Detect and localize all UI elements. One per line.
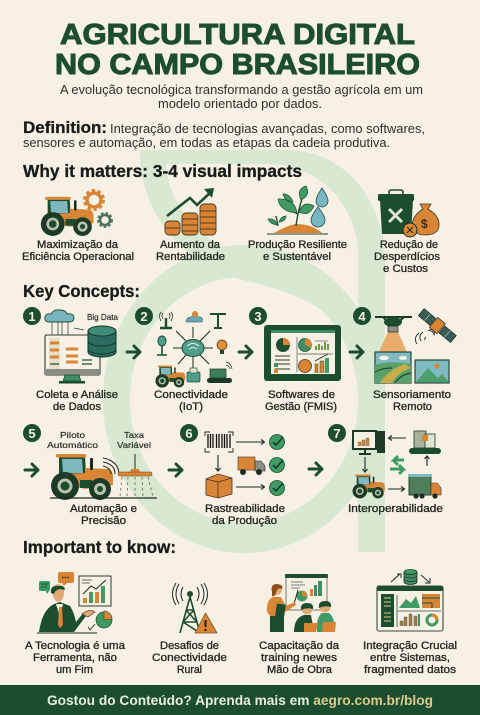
- caption: [265, 389, 337, 413]
- caption: Integração Crucial: [363, 640, 457, 652]
- caption: Softwares de: [268, 389, 335, 401]
- panel: systems integration: [363, 570, 457, 676]
- panel: workforce training: [259, 574, 339, 676]
- caption: e Custos: [383, 263, 428, 275]
- caption: (IoT): [179, 401, 203, 413]
- arrow 6 to 7: [309, 463, 322, 475]
- subtitle: [60, 82, 423, 111]
- caption: Remoto: [393, 401, 432, 413]
- icon: plant and drops: [267, 186, 328, 234]
- arrow 1 to 2: [127, 346, 140, 358]
- icon: tower with warning: [172, 583, 217, 633]
- label: piloto automatico: Automático: [47, 440, 98, 450]
- caption: Maximização da: [37, 239, 118, 251]
- label: taxa variavel: Variável: [117, 440, 151, 450]
- caption: Rastreabilidade: [205, 503, 285, 515]
- caption: [70, 503, 137, 527]
- caption: A Tecnologia é uma: [25, 640, 125, 652]
- panel: impact efficiency: [22, 191, 134, 263]
- label: taxa variavel: Taxa: [124, 430, 144, 440]
- definition: Integração de tecnologias avançadas, como softwares,: [110, 122, 425, 136]
- heading: why it matters: Why it matters: 3-4 visual impacts: [23, 161, 302, 181]
- caption: [152, 640, 227, 676]
- caption: da Produção: [212, 515, 277, 527]
- label: taxa variavel: [117, 430, 151, 450]
- panel: impact profitability: [156, 188, 225, 263]
- arrow into step 5: [25, 464, 38, 476]
- icon: connected systems loop: [353, 431, 441, 499]
- icon: presenter with chart: [37, 572, 112, 633]
- caption: [259, 640, 339, 676]
- caption: [22, 239, 134, 263]
- definition: Definition:: [23, 119, 107, 137]
- footer call to action: Gostou do Conteúdo? Aprenda mais em aegro.com.br/blog: [47, 692, 433, 708]
- caption: [156, 239, 225, 263]
- title: [55, 19, 420, 81]
- caption: fragmented datos: [364, 664, 456, 676]
- heading: key concepts: Key Concepts:: [23, 281, 140, 301]
- icon: autopilot tractor and sprayer: [50, 454, 157, 500]
- number badge 7: 7: [333, 426, 341, 441]
- icon: tablet dashboard: [264, 325, 341, 381]
- panel: concept 2 connectivity: [135, 307, 232, 413]
- caption: [248, 239, 347, 263]
- icon: trainer and students: [267, 574, 336, 632]
- caption: Ferramenta, não: [33, 652, 117, 664]
- definition: [23, 119, 425, 150]
- panel: concept 4 remote sensing: [353, 307, 458, 413]
- caption: Aumento da: [160, 239, 220, 251]
- caption: Coleta e Análise: [36, 389, 118, 401]
- caption: Precisão: [81, 515, 126, 527]
- caption: Capacitação da: [259, 640, 339, 652]
- title: NO CAMPO BRASILEIRO: [55, 49, 420, 81]
- caption: Rural: [177, 664, 202, 676]
- subtitle: A evolução tecnológica transformando a gestão agrícola em um: [60, 82, 423, 97]
- icon: cloud monitor and database: [45, 310, 116, 384]
- caption: [373, 389, 451, 413]
- caption: Conectividade: [154, 389, 228, 401]
- panel: concept 1 data: [23, 307, 118, 413]
- caption: Eficiência Operacional: [22, 251, 134, 263]
- caption: Rentabilidade: [156, 251, 225, 263]
- caption: de Dados: [53, 401, 101, 413]
- label: piloto automatico: [47, 430, 98, 450]
- caption: e Sustentável: [263, 251, 331, 263]
- definition: sensores e automação, em todas as etapas da cadeia produtiva.: [23, 136, 390, 150]
- panel: concept 5 automation: [23, 424, 157, 527]
- icon: barcode box truck checks: [205, 432, 284, 498]
- label: big data: Big Data: [87, 312, 118, 322]
- icon: drone satellite and fields: [375, 307, 458, 383]
- number badge 4: 4: [358, 309, 366, 324]
- panel: impact sustainable production: [248, 186, 347, 263]
- icon: tractor and gears: [41, 191, 112, 236]
- caption: um Fim: [56, 664, 93, 676]
- caption: [154, 389, 228, 413]
- caption: [363, 640, 457, 676]
- number badge 1: 1: [28, 309, 36, 324]
- footer bar: [0, 685, 480, 715]
- number badge 5: 5: [28, 426, 36, 441]
- panel: concept 7 interoperability: [328, 424, 443, 515]
- caption: [36, 389, 118, 413]
- caption: entre Sistemas,: [370, 652, 450, 664]
- caption: Produção Resiliente: [248, 239, 347, 251]
- arrow 5 to 6: [169, 464, 182, 476]
- label: piloto automatico: Piloto: [60, 430, 85, 440]
- subtitle: modelo orientado por dados.: [158, 96, 322, 111]
- icon: coin stacks and rising arrow: [165, 188, 216, 235]
- arrow 3 to 4: [350, 346, 363, 358]
- number badge 2: 2: [140, 309, 148, 324]
- panel: technology is a tool: [25, 572, 125, 676]
- caption: Automação e: [70, 503, 137, 515]
- icon: database and dashboard: [377, 570, 443, 631]
- caption: Desafios de: [160, 640, 219, 652]
- caption: [374, 239, 440, 275]
- arrow 2 to 3: [239, 346, 252, 358]
- caption: Desperdícios: [374, 251, 440, 263]
- number badge 3: 3: [254, 309, 262, 324]
- caption: Interoperabilidade: [348, 503, 443, 515]
- number badge 6: 6: [185, 426, 193, 441]
- panel: impact waste reduction: [374, 190, 440, 275]
- watermark: leaf ring logo: [103, 150, 385, 553]
- panel: connectivity challenges: [152, 583, 227, 676]
- icon: iot hub network: [155, 311, 232, 388]
- caption: Gestão (FMIS): [265, 401, 337, 413]
- panel: concept 3 software: [249, 307, 341, 413]
- caption: training newes: [261, 652, 337, 664]
- icon: waste bin and money bag: $: [421, 217, 428, 231]
- caption: Redução de: [380, 239, 438, 251]
- heading: important to know: Important to know:: [23, 537, 176, 557]
- caption: Conectividade: [152, 652, 227, 664]
- caption: [205, 503, 285, 527]
- caption: Mão de Obra: [267, 664, 332, 676]
- panel: concept 6 traceability: [180, 424, 285, 527]
- caption: Sensoriamento: [373, 389, 451, 401]
- title: AGRICULTURA DIGITAL: [60, 19, 415, 51]
- caption: [25, 640, 125, 676]
